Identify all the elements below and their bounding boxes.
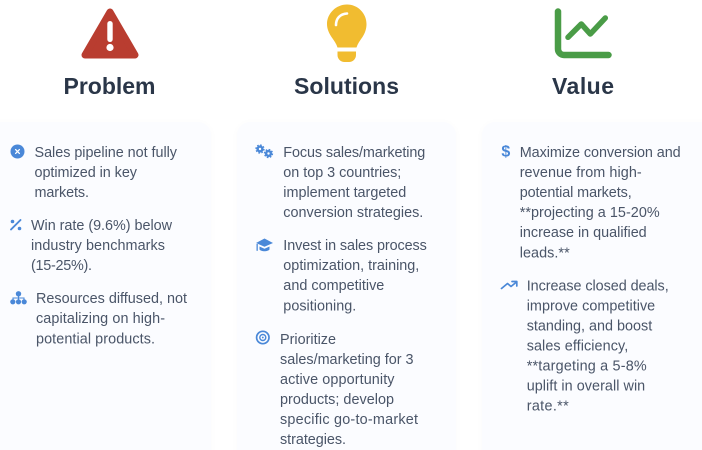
- item: maximize: leads.**: [520, 246, 570, 262]
- item: prioritize: specific go-to-market: [280, 412, 418, 428]
- item: maximize: increase in qualified: [520, 225, 647, 241]
- item: invest: [256, 238, 427, 314]
- column: Value: [482, 12, 702, 450]
- item: maximize: Maximize conversion and: [520, 145, 681, 161]
- item: resources: capitalizing on high-: [36, 311, 165, 327]
- panel: Solutions: [237, 122, 456, 450]
- item: invest: Invest in sales process: [283, 238, 427, 254]
- item: increase: improve competitive: [527, 298, 655, 314]
- item: maximize: **projecting a 15-20%: [520, 205, 660, 221]
- item: increase: uplift in overall win: [527, 378, 645, 394]
- item: invest: positioning.: [283, 298, 356, 314]
- column: Problem: [0, 12, 211, 450]
- item: win rate: industry benchmarks: [31, 238, 165, 254]
- item: focus: on top 3 countries;: [283, 165, 401, 181]
- item: increase: rate.**: [527, 398, 569, 414]
- item: increase: sales efficiency,: [527, 338, 628, 354]
- item: win rate: [11, 218, 173, 274]
- icon: gears: [256, 145, 272, 158]
- icon: graduation cap: [256, 238, 273, 251]
- item: invest: and competitive: [283, 278, 384, 294]
- heading: Solutions: Solutions: [294, 73, 399, 99]
- icon: light bulb: [327, 4, 366, 62]
- item: maximize: [501, 144, 681, 262]
- heading: Value: Value: [552, 73, 614, 99]
- item: maximize: revenue from high-: [520, 165, 642, 181]
- item: focus: [256, 145, 425, 221]
- item: focus: Focus sales/marketing: [283, 145, 425, 161]
- icon: line chart: [558, 12, 608, 55]
- item: invest: optimization, training,: [283, 258, 419, 274]
- item: sales pipeline: Sales pipeline not fully: [34, 145, 178, 161]
- panel: Value: [482, 122, 702, 450]
- item: prioritize: [257, 331, 418, 448]
- item: prioritize: products; develop: [280, 392, 394, 408]
- item: increase: [502, 278, 669, 414]
- icon: warning triangle: [85, 12, 135, 55]
- item: resources: [10, 291, 187, 348]
- icon: circle x: [10, 144, 24, 158]
- item: win rate: Win rate (9.6%) below: [31, 218, 173, 234]
- item: resources: potential products.: [36, 332, 155, 348]
- item: maximize: potential markets,: [520, 185, 632, 201]
- item: resources: Resources diffused, not: [36, 291, 187, 307]
- item: increase: **targeting a 5-8%: [527, 358, 647, 374]
- icon: percent: [11, 220, 21, 230]
- icon: sitemap: [10, 291, 27, 304]
- icon: bullseye: [257, 331, 269, 344]
- item: focus: conversion strategies.: [283, 205, 423, 221]
- item: prioritize: active opportunity: [280, 372, 395, 388]
- item: increase: Increase closed deals,: [527, 278, 669, 294]
- panel: Problem: [0, 122, 211, 450]
- item: sales pipeline: optimized in key: [34, 165, 138, 181]
- item: prioritize: strategies.: [280, 432, 346, 448]
- item: sales pipeline: markets.: [34, 185, 89, 201]
- icon: dollar: $: [501, 144, 510, 160]
- icon: trend arrow: [502, 282, 517, 288]
- item: focus: implement targeted: [283, 185, 406, 201]
- heading: Problem: Problem: [64, 73, 156, 99]
- item: sales pipeline: [10, 144, 178, 201]
- item: increase: standing, and boost: [527, 318, 652, 334]
- item: prioritize: sales/marketing for 3: [280, 352, 414, 368]
- item: prioritize: Prioritize: [280, 332, 336, 348]
- item: win rate: (15-25%).: [31, 258, 92, 274]
- column: Solutions: [237, 4, 456, 450]
